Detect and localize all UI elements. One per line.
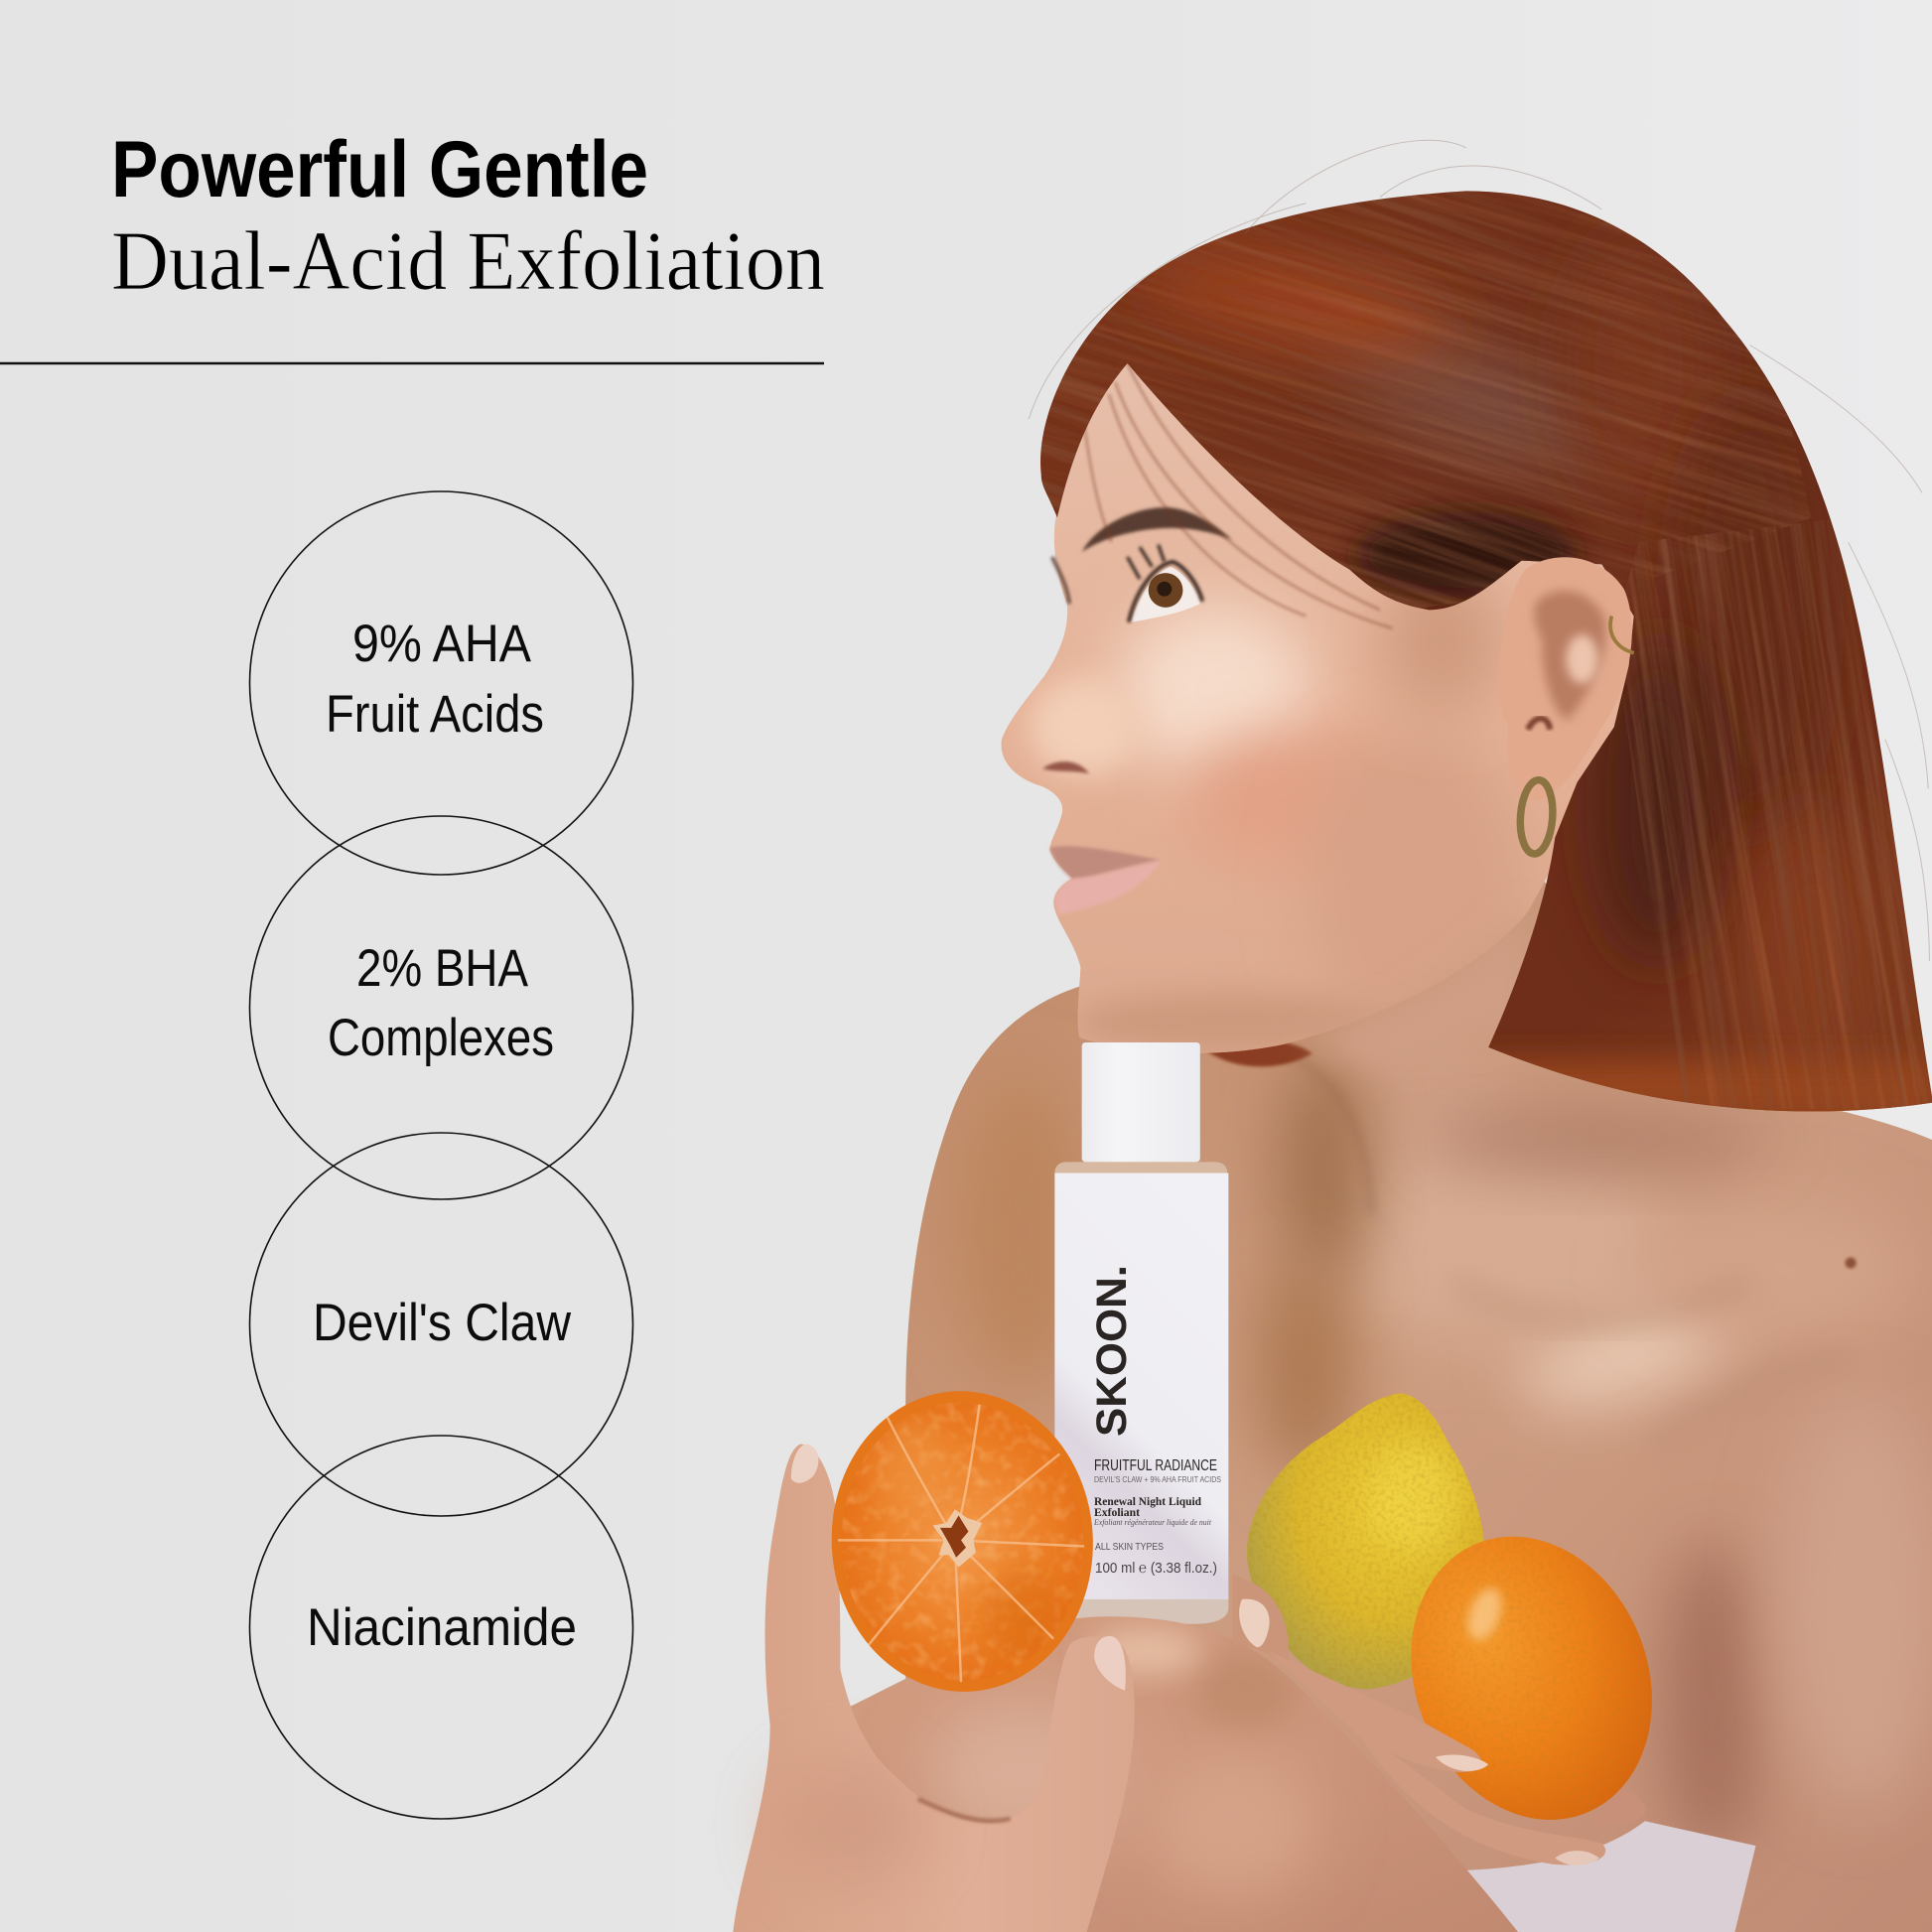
icon: helix ring [1610, 617, 1634, 653]
model: lower hair texture [1624, 522, 1905, 1109]
fruit: segment lines [838, 1405, 1084, 1682]
model: face [1002, 363, 1651, 1072]
model: fringe strands over forehead [1084, 363, 1392, 628]
model: thumbnail [791, 1445, 818, 1483]
label: Complexes: Complexes [328, 1009, 554, 1067]
model: nostril [1042, 761, 1089, 773]
circle: 9% AHA Fruit Acids [250, 491, 633, 875]
fruit: tangerine half [824, 1384, 1101, 1699]
skin types: ALL SKIN TYPES [1095, 1542, 1164, 1553]
product name second line: Exfoliant [1094, 1505, 1140, 1519]
model: towel [1463, 1821, 1756, 1932]
model: eye [1052, 545, 1202, 622]
product: bottle label text [1088, 1265, 1221, 1577]
model: hair tip behind neck [1201, 1039, 1312, 1066]
title [111, 125, 825, 308]
product line: FRUITFUL RADIANCE [1094, 1457, 1217, 1474]
circle: Devil's Claw [250, 1133, 633, 1516]
product name: Renewal Night Liquid [1094, 1494, 1201, 1508]
model: upper hair sheen [1048, 195, 1811, 604]
French product name: Exfoliant régénérateur liquide de nuit [1093, 1518, 1212, 1527]
ingredients line: DEVIL'S CLAW + 9% AHA FRUIT ACIDS [1094, 1475, 1221, 1484]
model: foreground arm [788, 1616, 1518, 1932]
title line two: Dual-Acid Exfoliation [111, 214, 825, 308]
model: left hand [733, 1445, 1135, 1932]
model: flyaway hairs [1029, 140, 1930, 961]
circle: Niacinamide [250, 1436, 633, 1819]
product: bottle shapes [1054, 1042, 1228, 1624]
model: thumb behind tangerine [1595, 1774, 1645, 1825]
model: hoop earring [1518, 779, 1555, 855]
model: upper hair dark strands [1040, 192, 1809, 608]
model: shoulder, neck and chest [905, 863, 1932, 1932]
fruit: pulp texture [826, 1392, 1097, 1688]
model: fingernail [1094, 1636, 1126, 1691]
ingredient circles [250, 491, 633, 1819]
brand name: SKOON. [1088, 1265, 1136, 1437]
fruit: lemon [1247, 1394, 1484, 1690]
label: 9% AHA: 9% AHA [352, 615, 532, 673]
model: upper hair texture [1040, 192, 1809, 608]
label: 2% BHA: 2% BHA [356, 939, 529, 998]
model: jaw blend into neck [1307, 905, 1528, 1072]
model: right hand fingers [1232, 1575, 1605, 1865]
model: ear [1498, 557, 1634, 801]
model: lower hair sheen [1626, 526, 1916, 1109]
label: Devil's Claw: Devil's Claw [313, 1294, 572, 1352]
label: Fruit Acids: Fruit Acids [326, 685, 544, 744]
model: lips [1049, 846, 1161, 914]
fruit: whole tangerine [1411, 1537, 1652, 1820]
ingredient labels [307, 615, 577, 1657]
volume: 100 ml ℮ (3.38 fl.oz.) [1095, 1560, 1217, 1577]
title line one: Powerful Gentle [111, 125, 648, 214]
fruit: lemon rind texture [1251, 1394, 1480, 1684]
model: eyebrow [1082, 507, 1232, 552]
label: Niacinamide: Niacinamide [307, 1598, 577, 1657]
circle: 2% BHA Complexes [250, 816, 633, 1199]
photo: model with bottle and citrus fruits [733, 0, 1932, 1932]
fruit: core [932, 1509, 982, 1568]
model: lower hair dark strands [1624, 522, 1905, 1109]
model: hair [1029, 139, 1932, 1112]
fruit: tangerine peel texture [1412, 1537, 1646, 1820]
